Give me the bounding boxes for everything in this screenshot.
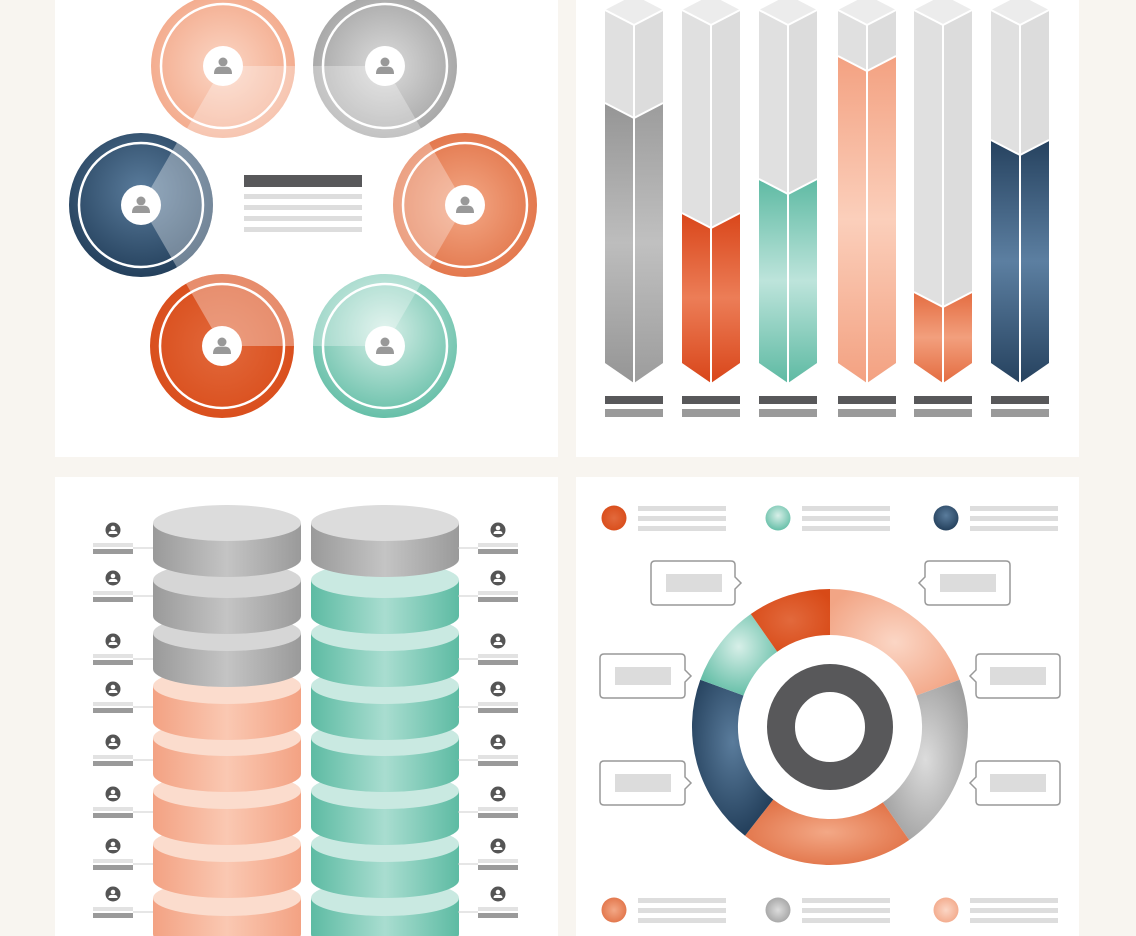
bar 5 orange light xyxy=(914,0,972,417)
callouts xyxy=(600,561,1060,805)
left stack xyxy=(153,505,301,936)
donut xyxy=(692,589,968,865)
bar 6 navy xyxy=(991,0,1049,417)
legend top xyxy=(602,506,1058,531)
circle: teal xyxy=(313,274,457,418)
right labels xyxy=(458,522,518,918)
bar 3 teal xyxy=(759,0,817,417)
bar 1 gray xyxy=(605,0,663,417)
panel: donut chart (bottom-right) xyxy=(576,477,1079,936)
circle: orange xyxy=(367,133,537,277)
circle: gray xyxy=(305,0,457,164)
panel: cylinder stacks (bottom-left) xyxy=(55,477,558,936)
text block placeholder xyxy=(244,175,362,232)
circle: peach xyxy=(151,0,295,138)
panel: 3D bar chart (top-right) xyxy=(576,0,1079,457)
bar 2 orange xyxy=(682,0,740,417)
circle: navy xyxy=(69,133,239,277)
circle: red xyxy=(150,248,302,418)
bar 4 peach xyxy=(838,0,896,417)
panel: circles (top-left) xyxy=(55,0,558,457)
left labels xyxy=(93,522,153,918)
legend bottom xyxy=(602,898,1058,923)
right stack xyxy=(311,505,459,936)
